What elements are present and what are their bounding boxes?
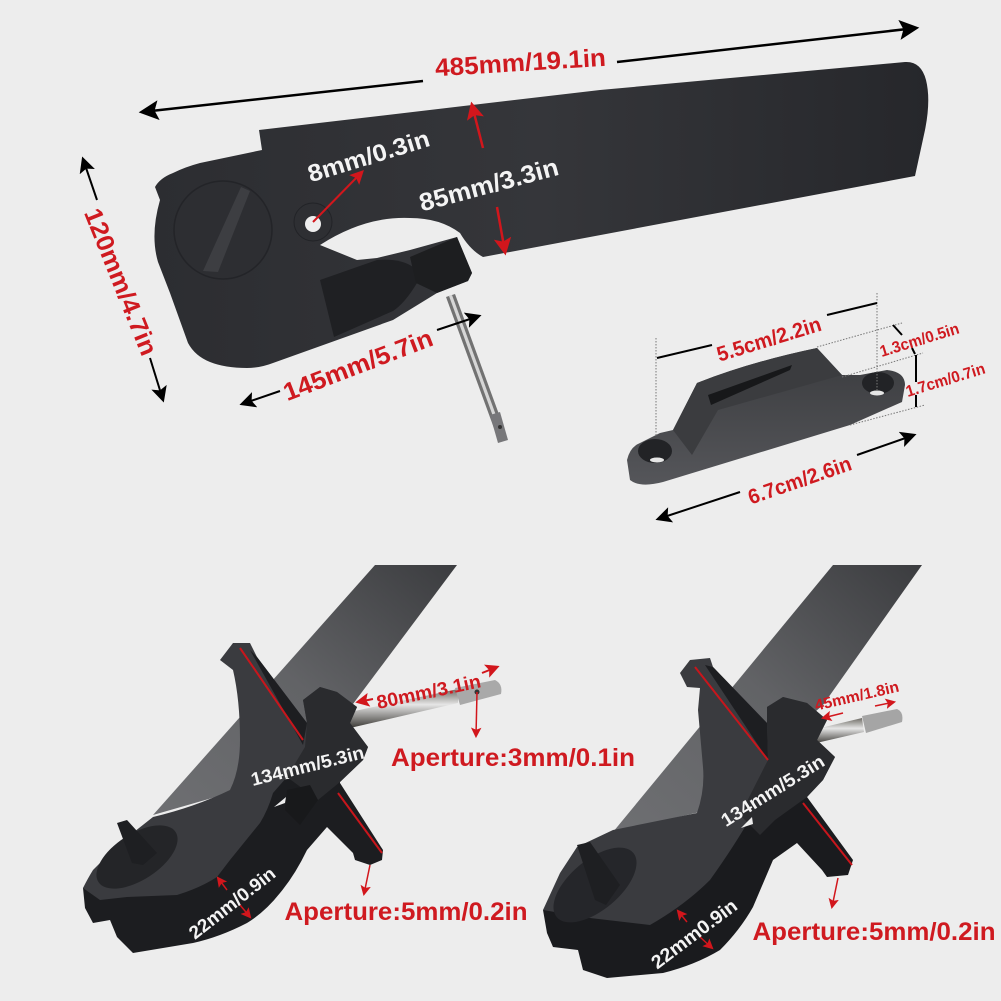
label 6.7cm: 6.7cm/2.6in — [745, 452, 855, 509]
left photo dimensions — [185, 648, 635, 943]
knob — [541, 834, 649, 936]
steel pin — [446, 294, 508, 443]
dimension: hole — [305, 125, 433, 222]
45mm arrows — [823, 713, 843, 718]
centre spine — [287, 687, 368, 800]
cleat slot — [708, 365, 792, 405]
red lines — [695, 667, 852, 865]
dotted guides — [656, 293, 925, 437]
arrow down — [497, 207, 505, 252]
label 22mm: 22mm/0.9in — [185, 863, 279, 943]
mount hole right — [862, 372, 894, 396]
blade shaft — [153, 565, 457, 815]
pivot hole — [294, 203, 332, 241]
dimension: overall length — [142, 28, 916, 112]
dimension: blade width — [416, 105, 562, 252]
centre spine — [740, 697, 835, 835]
steel pin — [350, 680, 501, 728]
pivot knob — [174, 181, 272, 279]
arrow right — [617, 28, 916, 62]
aperture arrow — [832, 878, 838, 907]
label 45mm: 45mm/1.8in — [813, 679, 901, 715]
arrow up — [83, 159, 97, 200]
white gap — [274, 797, 286, 807]
dimension: head length — [242, 316, 479, 407]
label 1.7cm: 1.7cm/0.7in — [904, 361, 987, 401]
blade body — [154, 62, 928, 368]
bottom-left rudder photo — [83, 565, 501, 953]
head dark lower — [543, 790, 853, 978]
label 5.5cm: 5.5cm/2.2in — [714, 313, 824, 367]
clamp cleat — [627, 348, 905, 485]
arrow left — [142, 81, 423, 112]
fin shadow — [250, 650, 307, 745]
arrow down — [150, 358, 163, 400]
steel pin — [812, 709, 902, 744]
label 134mm: 134mm/5.3in — [249, 741, 366, 790]
cleat top face — [673, 348, 842, 455]
red lines — [240, 648, 382, 853]
rudder blade top view — [154, 62, 928, 443]
aperture arrows — [476, 692, 477, 736]
mount hole left — [638, 439, 672, 463]
arrow hole — [313, 172, 362, 222]
arrow 6.7cm left — [658, 492, 740, 519]
bottom-right rudder photo — [541, 565, 922, 978]
dimension: head height — [78, 159, 163, 400]
label 145mm: 145mm/5.7in — [279, 324, 437, 407]
label 85mm: 85mm/3.3in — [416, 153, 562, 217]
label 134mm: 134mm/5.3in — [717, 750, 828, 831]
white gap — [741, 817, 753, 828]
head plate — [83, 643, 368, 900]
label aperture 5mm: Aperture:5mm/0.2in — [284, 898, 528, 926]
arrow up — [472, 105, 483, 148]
label aperture 5mm: Aperture:5mm/0.2in — [752, 918, 996, 946]
label 485mm: 485mm/19.1in — [434, 44, 607, 82]
arrow left — [242, 391, 280, 404]
label 1.3cm: 1.3cm/0.5in — [878, 321, 961, 361]
blade shaft — [613, 565, 922, 832]
fin shadow — [705, 665, 768, 760]
dark lower lobe — [320, 260, 418, 337]
arrow 6.7cm right — [857, 435, 914, 455]
line 5.5cm — [657, 303, 877, 358]
head plate — [543, 658, 835, 925]
label 80mm: 80mm/3.1in — [375, 671, 483, 714]
spine slot — [285, 785, 318, 825]
22mm arrows — [218, 878, 227, 890]
label 8mm: 8mm/0.3in — [305, 125, 433, 188]
clamp block — [410, 237, 472, 293]
knob — [86, 813, 188, 901]
label 22mm: 22mm0.9in — [648, 896, 742, 974]
label aperture 3mm: Aperture:3mm/0.1in — [391, 744, 635, 772]
head dark lower — [83, 775, 383, 953]
label 120mm: 120mm/4.7in — [78, 204, 163, 360]
right photo dimensions — [648, 667, 996, 974]
cleat dimensions — [656, 293, 987, 519]
22mm arrows — [678, 911, 687, 922]
ticks — [893, 325, 916, 407]
arrow right — [437, 316, 479, 330]
80mm arrows — [358, 699, 373, 702]
